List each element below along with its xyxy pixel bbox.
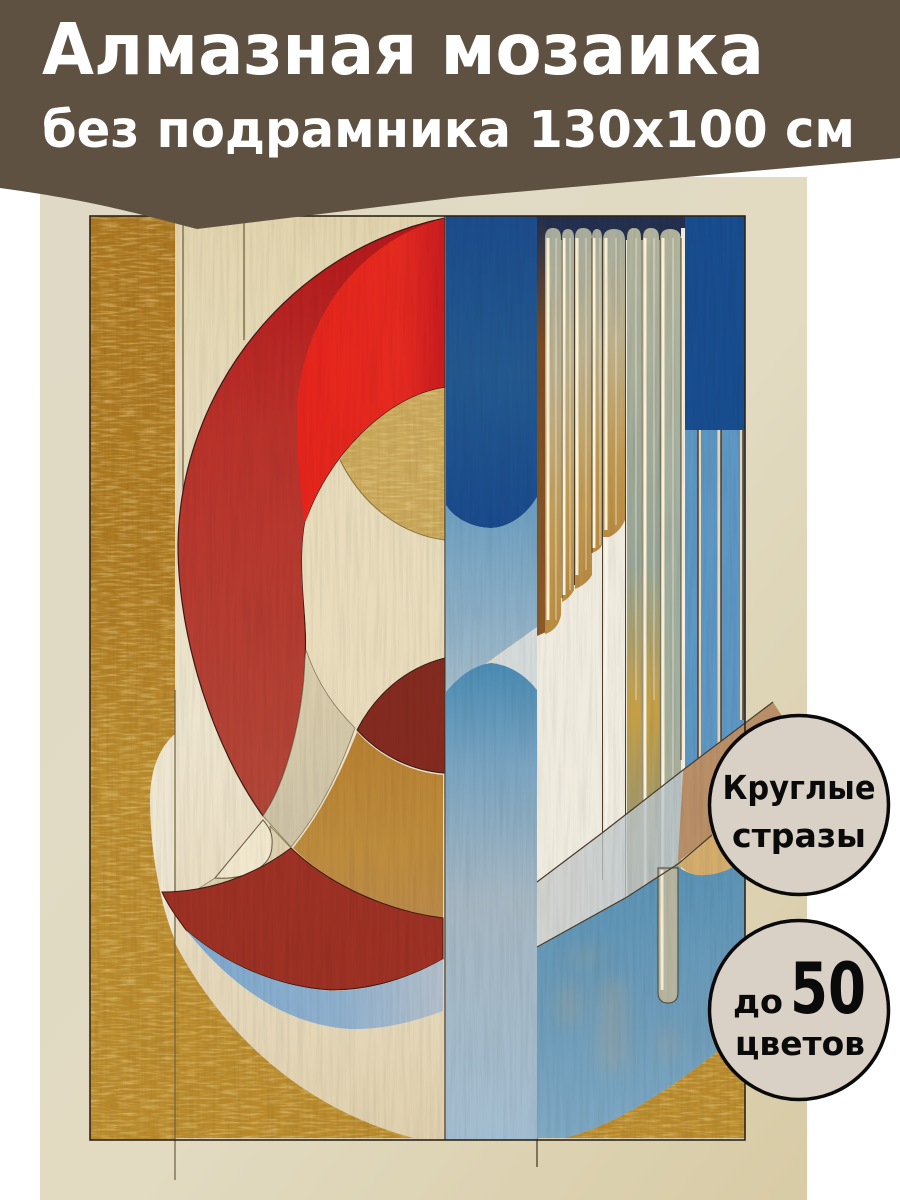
gold half disc xyxy=(678,812,745,875)
header banner xyxy=(0,0,900,229)
brushed paint texture xyxy=(90,216,745,1140)
gold circle outline xyxy=(340,460,445,540)
dark band behind tube tops xyxy=(537,216,685,240)
badge: round rhinestones xyxy=(710,716,888,894)
painting frame outline xyxy=(90,216,745,1140)
tube highlight xyxy=(660,870,664,990)
gold lower right corner xyxy=(563,1020,745,1138)
gold lower left triangle xyxy=(175,943,413,1138)
cream curled shape xyxy=(215,820,272,878)
thin vertical lines xyxy=(175,216,244,1180)
upper right blue block xyxy=(685,216,745,430)
cream centre shape xyxy=(302,460,445,730)
orange section xyxy=(293,732,443,918)
badge: up to 50 colours: 50 xyxy=(790,948,866,1030)
gold left column xyxy=(90,216,175,1140)
dark red crescent xyxy=(178,218,445,816)
dark edge strip xyxy=(537,216,546,636)
title line 1: Алмазная мозаика xyxy=(42,8,764,91)
white tube panel xyxy=(537,216,685,956)
painting canvas xyxy=(40,177,807,1200)
painting: abstract geometric composition xyxy=(40,177,807,1200)
bright red crescent xyxy=(297,218,445,523)
beige swoosh xyxy=(263,650,355,847)
dark red lower lens xyxy=(162,848,443,990)
title line 2: без подрамника 130х100 см xyxy=(42,101,855,160)
badge: up to 50 colours xyxy=(710,920,888,1100)
inner cream field xyxy=(175,216,445,1140)
gold circle segment xyxy=(340,387,445,540)
badge: round rhinestones: Круглые xyxy=(722,768,876,807)
maroon half circle xyxy=(357,658,445,773)
tan paint blotches on bowl xyxy=(558,950,676,1070)
cream left bulge xyxy=(150,733,176,943)
glass tubes xyxy=(545,228,681,900)
light blue crescent xyxy=(186,930,443,1029)
blue bowl xyxy=(537,860,745,1138)
pale wedge xyxy=(491,627,537,690)
dark blue column xyxy=(446,216,537,528)
badge: up to 50 colours: до xyxy=(733,982,783,1021)
mid blue panel xyxy=(446,497,537,692)
badge: round rhinestones: стразы xyxy=(732,816,866,855)
light blue stripes xyxy=(681,228,745,800)
lower tube over bowl xyxy=(658,868,678,1003)
gold mesh texture xyxy=(90,216,745,1140)
beige strip under curl xyxy=(198,826,291,889)
centre divider lines xyxy=(445,216,537,1167)
band outlines xyxy=(537,702,773,947)
blue dome xyxy=(446,663,537,1140)
badge: up to 50 colours: цветов xyxy=(735,1024,865,1063)
tan wing xyxy=(678,702,782,862)
diagonal pale band xyxy=(537,770,683,947)
